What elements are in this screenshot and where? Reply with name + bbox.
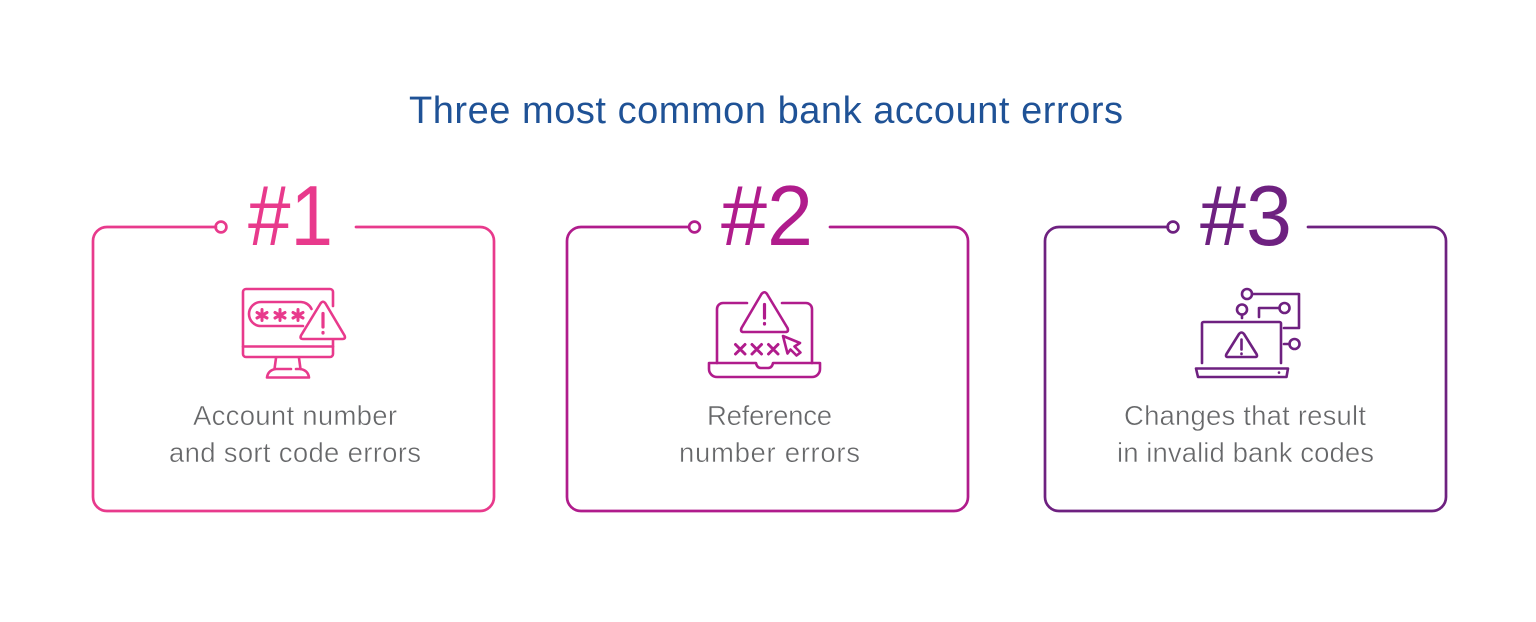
icon: laptop with warning and circuit nodes	[1196, 289, 1300, 377]
panel frame 3	[1045, 222, 1446, 511]
text: error 1 label: Account number	[193, 400, 397, 431]
text: error 2 label: Reference	[707, 400, 832, 431]
panel: error 1	[93, 169, 494, 511]
text: error 2 label: number errors	[679, 437, 860, 468]
text: error 1 label: and sort code errors	[169, 437, 421, 468]
heading: #1: #1	[248, 169, 333, 264]
text: error 3 label: in invalid bank codes	[1117, 437, 1374, 468]
title: Three most common bank account errors	[409, 90, 1123, 132]
text: error 2 label	[679, 400, 860, 468]
heading: #2: #2	[721, 169, 813, 264]
panel frame 1	[93, 222, 494, 511]
text: error 3 label: Changes that result	[1124, 400, 1366, 431]
text: error 3 label	[1117, 400, 1374, 468]
text: error 1 label	[169, 400, 421, 468]
panel: error 2	[567, 169, 968, 511]
panel: error 3	[1045, 169, 1446, 511]
icon: monitor with password warning	[243, 289, 345, 378]
icon: laptop with warning and cursor	[709, 292, 820, 377]
panel frame 2	[567, 222, 968, 511]
heading: #3: #3	[1200, 169, 1292, 264]
